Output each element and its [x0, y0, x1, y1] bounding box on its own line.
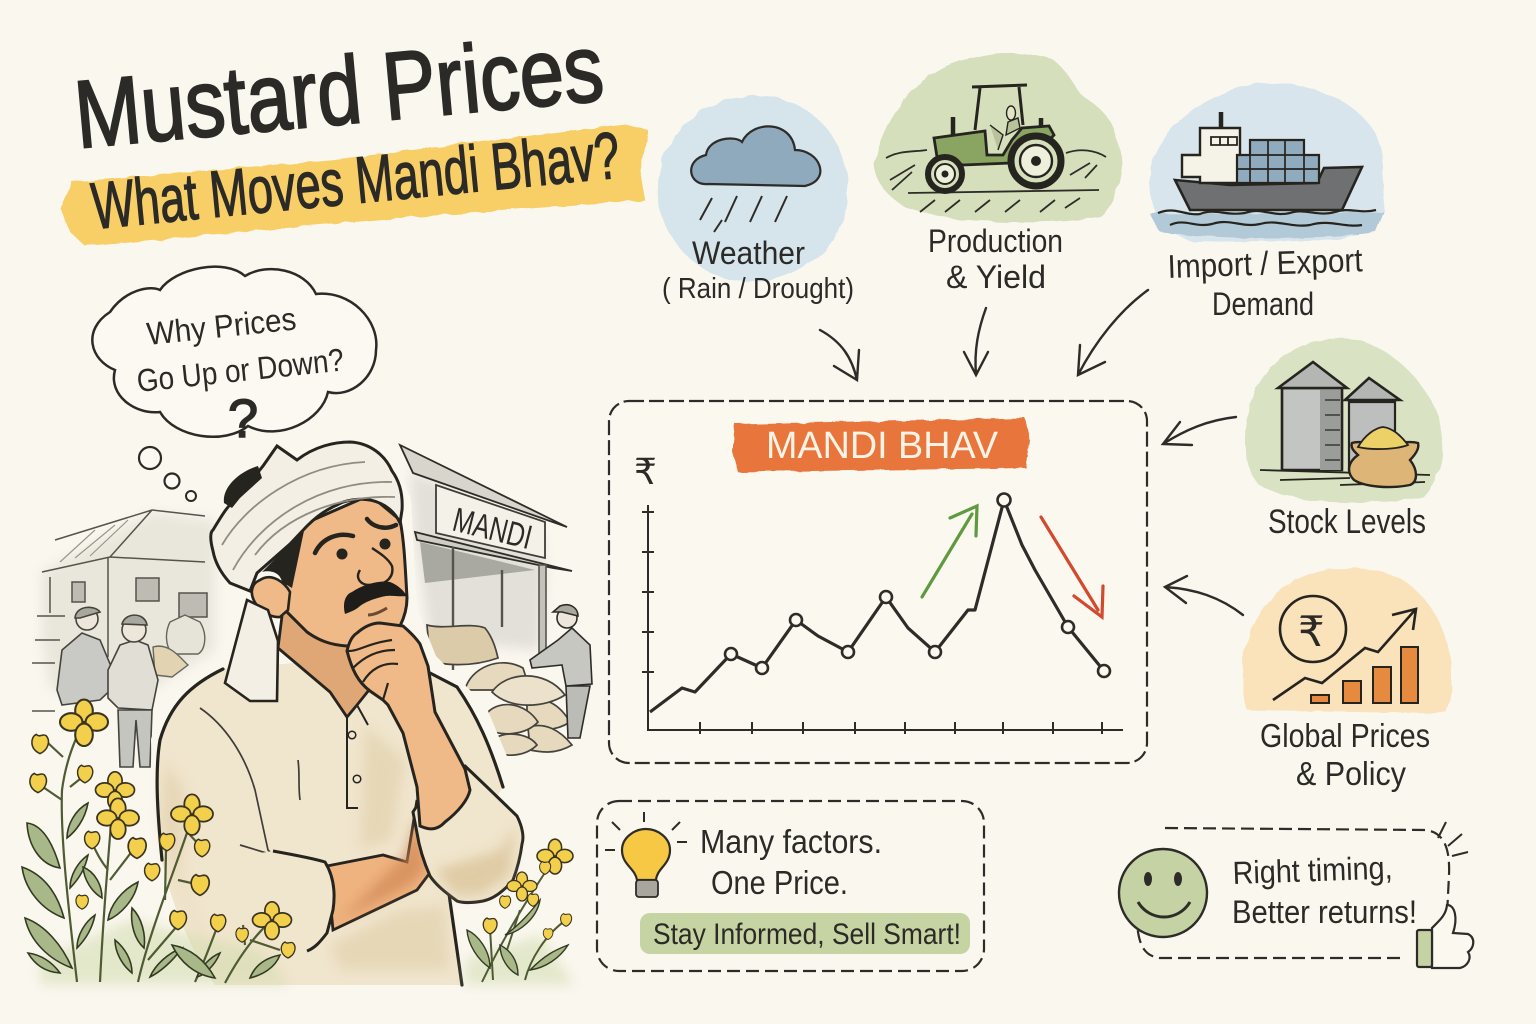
icon: cargo ship — [1149, 83, 1384, 242]
chart banner — [732, 418, 1030, 472]
moustache — [344, 582, 407, 614]
icon: rupee coin and rising bars — [1242, 568, 1452, 713]
subtitle on yellow highlight: What Moves Mandi Bhav? — [88, 118, 623, 243]
mustard plant: left — [22, 700, 295, 985]
factor: production and yield — [874, 53, 1122, 295]
shirt wrinkles — [200, 708, 300, 905]
grain sack — [1349, 442, 1418, 487]
waves — [1158, 210, 1376, 226]
chart banner: MANDI BHAV — [766, 425, 999, 467]
forearm shading — [340, 815, 425, 920]
driver — [1006, 106, 1016, 120]
factor: weather — [658, 96, 854, 305]
thought bubble: ? — [228, 389, 258, 449]
right mandi shed: MANDI — [449, 501, 536, 557]
factor: weather: ( Rain / Drought) — [662, 273, 854, 305]
left cuff — [215, 851, 334, 951]
eyes — [336, 548, 348, 560]
icon: smiley — [1119, 849, 1207, 937]
leaves — [22, 803, 280, 978]
rupee axis symbol: ₹ — [634, 452, 657, 493]
bridge and cabin — [1182, 128, 1240, 183]
turban — [211, 442, 402, 591]
factor: import / export demand — [1149, 83, 1384, 322]
callout: right timing: Right timing, — [1232, 849, 1393, 891]
eyebrows — [315, 519, 396, 553]
roof and posts — [972, 85, 1027, 130]
factor: global prices and policy: & Policy — [1296, 755, 1406, 792]
hull — [1175, 167, 1362, 210]
field lines — [886, 150, 1106, 212]
left traders — [57, 607, 158, 767]
small silo — [1349, 402, 1395, 470]
thought bubble: Go Up or Down? — [135, 341, 346, 399]
hair knot — [224, 466, 262, 508]
shirt outline — [157, 669, 503, 985]
title: Mustard Prices — [70, 14, 608, 169]
callout: many factors one price — [597, 801, 984, 971]
icon: rupee coin and rising bars: ₹ — [1298, 607, 1325, 656]
sleeve shading — [435, 825, 515, 895]
neck — [278, 608, 400, 717]
left shed — [32, 510, 215, 711]
paper halo around farmer — [158, 445, 522, 985]
wheels — [1011, 136, 1061, 186]
hair — [262, 526, 305, 588]
icon: rain cloud — [658, 96, 848, 282]
arrow: stock levels to chart — [1163, 417, 1236, 445]
arrow: import export to chart — [1078, 290, 1148, 375]
nose — [358, 548, 392, 585]
ground — [1260, 470, 1430, 485]
spark marks — [1438, 822, 1468, 856]
stems — [40, 723, 280, 983]
callout: right timing: Better returns! — [1232, 894, 1417, 930]
turban tail — [225, 600, 278, 701]
large silo — [1282, 388, 1342, 470]
mustard plant: right — [465, 839, 575, 985]
collar and placket — [347, 705, 368, 808]
arrow: global prices to chart — [1165, 576, 1243, 615]
right trader — [530, 605, 592, 738]
tractor body — [934, 126, 1054, 165]
blossoms — [30, 700, 295, 958]
right rolled sleeve — [413, 766, 523, 902]
factor: stock levels: Stock Levels — [1268, 503, 1426, 541]
callout: right timing — [1119, 822, 1473, 968]
turban folds — [222, 462, 395, 570]
containers — [1237, 140, 1319, 183]
left forearm — [327, 800, 432, 930]
arrow: price rising — [922, 506, 977, 597]
mandi market background — [32, 445, 592, 767]
icon: silos and grain sack — [1245, 339, 1443, 502]
face — [283, 495, 407, 646]
factor: weather: Weather — [692, 235, 805, 271]
callout: many factors one price: Many factors. — [700, 823, 882, 860]
factor: production and yield: Production — [928, 223, 1063, 259]
hand and forearm — [347, 623, 470, 829]
factor: production and yield: & Yield — [946, 259, 1046, 295]
mouth — [368, 608, 387, 615]
price line — [650, 494, 1110, 712]
arrow: production to chart — [964, 308, 988, 375]
callout: many factors one price: One Price. — [711, 864, 848, 901]
shirt — [157, 660, 503, 985]
ear — [252, 577, 290, 617]
subtitle on yellow highlight — [60, 118, 648, 246]
arrow: price falling — [1041, 517, 1103, 617]
thought bubble — [92, 267, 376, 501]
icon: light bulb — [605, 812, 687, 897]
thought bubble: Why Prices — [145, 300, 298, 352]
factor: stock levels — [1245, 339, 1443, 541]
sack piles — [427, 625, 572, 755]
factor: global prices and policy: Global Prices — [1260, 717, 1430, 754]
factor: import / export demand: Demand — [1212, 286, 1314, 322]
icon: thumbs up — [1417, 905, 1473, 968]
arrow: weather to chart — [820, 330, 859, 380]
exhausts — [953, 117, 1041, 135]
factor: global prices and policy — [1242, 568, 1452, 792]
icon: tractor — [874, 53, 1122, 222]
fingers — [347, 640, 398, 700]
factor: import / export demand: Import / Export — [1167, 241, 1363, 285]
green highlight message: Stay Informed, Sell Smart! — [653, 918, 961, 951]
chart axes — [642, 505, 1123, 734]
shirt shading — [160, 725, 450, 970]
buttons — [348, 731, 361, 783]
panel: mandi bhav chart — [609, 401, 1147, 763]
ground wash — [40, 920, 290, 985]
right mandi shed — [400, 445, 572, 670]
farmer — [157, 442, 523, 985]
